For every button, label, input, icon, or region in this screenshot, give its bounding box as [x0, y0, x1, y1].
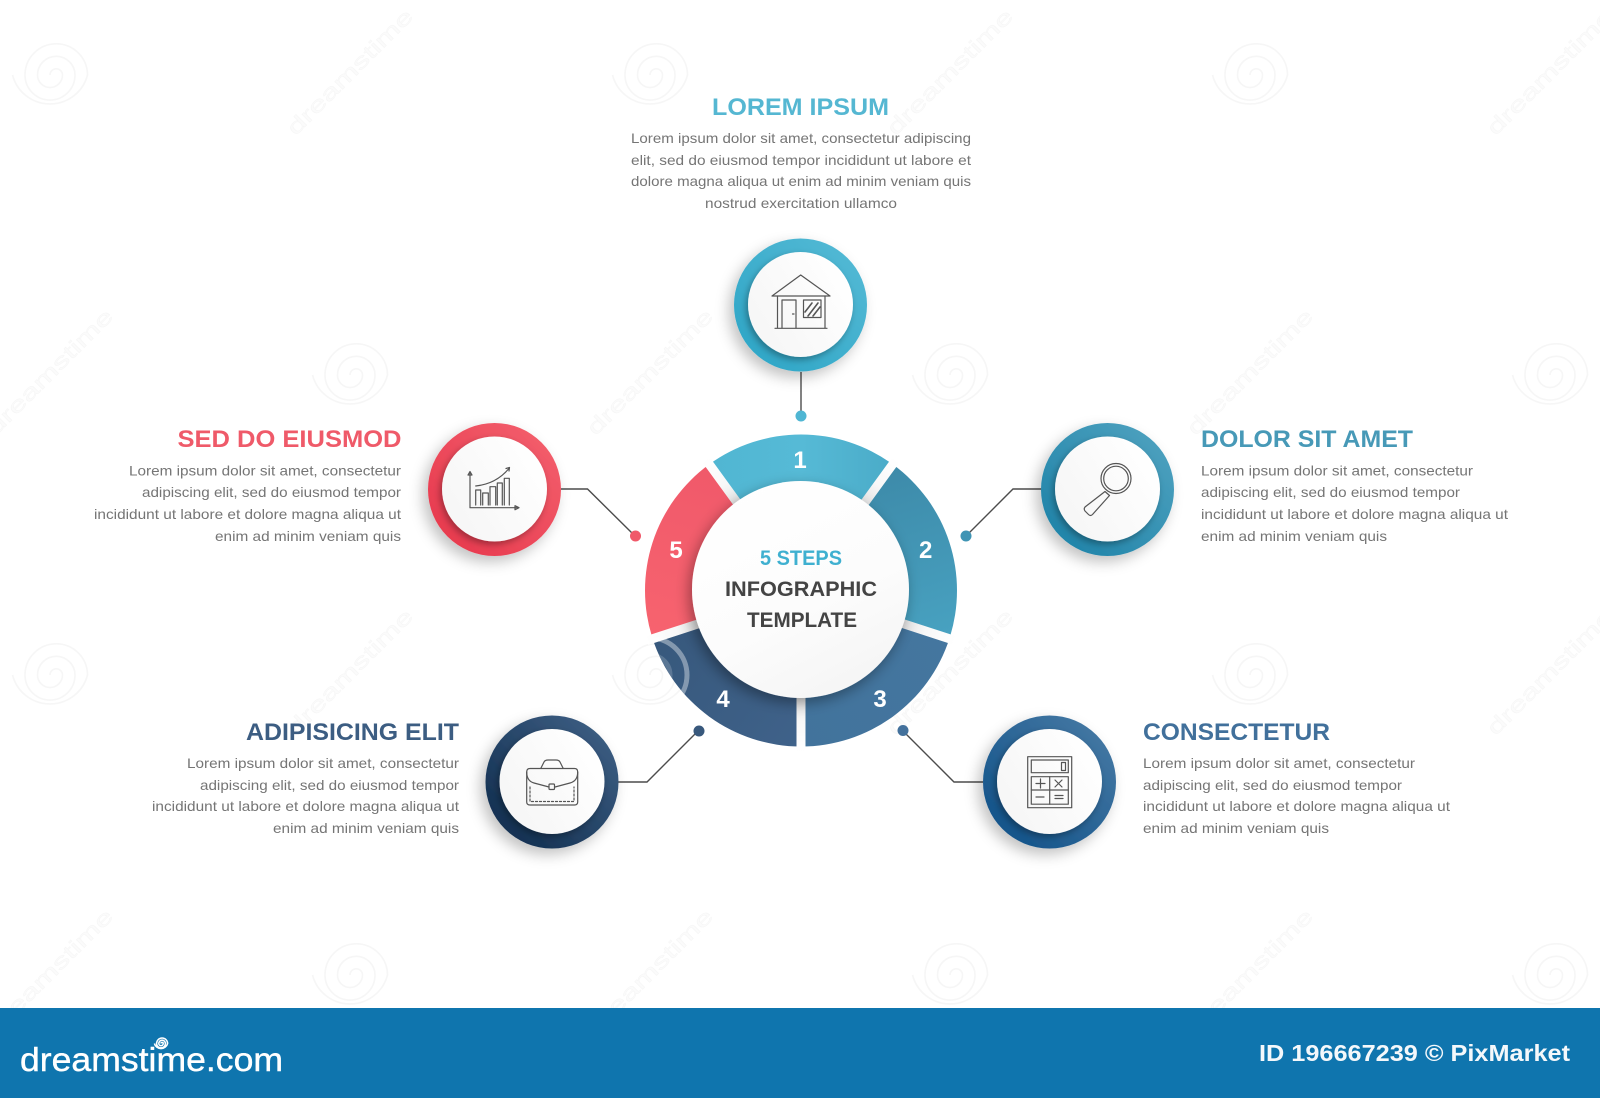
connector line	[969, 489, 1041, 533]
description: dolore magna aliqua ut enim ad minim veniam quis	[631, 173, 971, 189]
text: dreamstime	[883, 605, 1018, 740]
heading: LOREM IPSUM	[712, 94, 889, 121]
description	[1143, 755, 1450, 836]
description: enim ad minim veniam quis	[215, 528, 401, 544]
step 3 block: Consectetur	[898, 716, 1450, 848]
image id and credit: ID 196667239 © PixMarket	[1259, 1040, 1570, 1066]
step number 1: 1	[793, 447, 807, 474]
footer bar	[0, 1008, 1600, 1098]
heading: ADIPISICING ELIT	[246, 719, 459, 746]
text: dreamstime	[883, 5, 1018, 140]
icon: magnifier	[1084, 464, 1131, 516]
step 5 block: Sed do eiusmod	[94, 423, 641, 556]
step number 4: 4	[716, 686, 730, 713]
description: enim ad minim veniam quis	[1201, 528, 1387, 544]
badge disc	[442, 436, 547, 542]
description: Lorem ipsum dolor sit amet, consectetur adipiscing	[631, 130, 971, 146]
description: Lorem ipsum dolor sit amet, consectetur	[187, 755, 459, 771]
step number 5: 5	[669, 537, 683, 564]
badge ring	[1041, 423, 1174, 556]
badge disc	[1055, 436, 1160, 542]
heading: SED DO EIUSMOD	[178, 426, 402, 453]
center title: infographic: INFOGRAPHIC	[725, 577, 877, 601]
description	[631, 130, 971, 211]
connector dot	[796, 410, 806, 422]
text: dreamstime	[1183, 905, 1318, 1040]
description	[1201, 462, 1508, 544]
badge ring	[486, 716, 618, 848]
ring segment 1	[709, 435, 893, 510]
text: dreamstime	[1483, 605, 1600, 740]
description: adipiscing elit, sed do eiusmod tempor	[1143, 777, 1402, 793]
step 1 block: Lorem Ipsum	[631, 94, 971, 422]
ring segment 4	[635, 602, 828, 771]
description: incididunt ut labore et dolore magna aliqua ut	[1201, 506, 1508, 522]
heading: CONSECTETUR	[1143, 719, 1330, 746]
description: enim ad minim veniam quis	[1143, 820, 1329, 836]
description: Lorem ipsum dolor sit amet, consectetur	[129, 462, 401, 478]
connector line	[618, 733, 696, 782]
ring segment 2	[850, 455, 978, 653]
icon: house	[772, 275, 830, 328]
badge disc	[997, 729, 1102, 834]
icon: logo spiral	[154, 1038, 168, 1049]
description: incididunt ut labore et dolore magna aliqua ut	[1143, 798, 1450, 814]
connector dot	[630, 530, 641, 542]
ring segment 3	[774, 602, 967, 771]
connector line	[905, 733, 983, 782]
badge disc	[748, 252, 853, 357]
badge disc	[500, 729, 604, 834]
icon: briefcase	[527, 760, 578, 805]
connector dot	[694, 726, 704, 736]
step 2 block: Dolor sit amet	[960, 423, 1508, 556]
description: adipiscing elit, sed do eiusmod tempor	[1201, 484, 1460, 500]
icon: calculator	[1028, 757, 1072, 808]
text: dreamstime	[283, 5, 418, 140]
connector line	[800, 372, 802, 412]
text: dreamstime	[1483, 5, 1600, 140]
step number 3: 3	[873, 686, 887, 713]
center disc with title	[692, 481, 909, 698]
description: elit, sed do eiusmod tempor incididunt ut labore et	[631, 152, 971, 168]
description	[94, 462, 401, 544]
description: incididunt ut labore et dolore magna aliqua ut	[152, 798, 459, 814]
connector line	[561, 489, 633, 534]
badge ring	[428, 423, 561, 556]
connector dot	[898, 725, 908, 736]
description: adipiscing elit, sed do eiusmod tempor	[142, 484, 401, 500]
center title: template: TEMPLATE	[747, 608, 857, 632]
badge ring	[983, 716, 1116, 848]
description	[152, 755, 459, 836]
ring segment 5	[624, 455, 752, 653]
description: nostrud exercitation ullamco	[705, 195, 897, 211]
description: Lorem ipsum dolor sit amet, consectetur	[1201, 462, 1473, 478]
icon: rising bar chart	[468, 468, 519, 510]
description: adipiscing elit, sed do eiusmod tempor	[200, 777, 459, 793]
text: dreamstime	[1183, 305, 1318, 440]
center title: 5 steps: 5 STEPS	[760, 546, 842, 570]
text: dreamstime	[583, 305, 718, 440]
heading: DOLOR SIT AMET	[1201, 426, 1413, 453]
dreamstime logo text: dreamstime.com	[20, 1041, 283, 1078]
text: dreamstime	[283, 605, 418, 740]
connector dot	[960, 530, 972, 542]
description: Lorem ipsum dolor sit amet, consectetur	[1143, 755, 1415, 771]
description: incididunt ut labore et dolore magna aliqua ut	[94, 506, 401, 522]
step number 2: 2	[919, 537, 932, 564]
central segmented ring with five numbered steps	[645, 434, 957, 746]
badge ring	[734, 238, 867, 372]
description: enim ad minim veniam quis	[273, 820, 459, 836]
step 4 block: Adipisicing elit	[152, 716, 704, 848]
text: dreamstime	[583, 905, 718, 1040]
